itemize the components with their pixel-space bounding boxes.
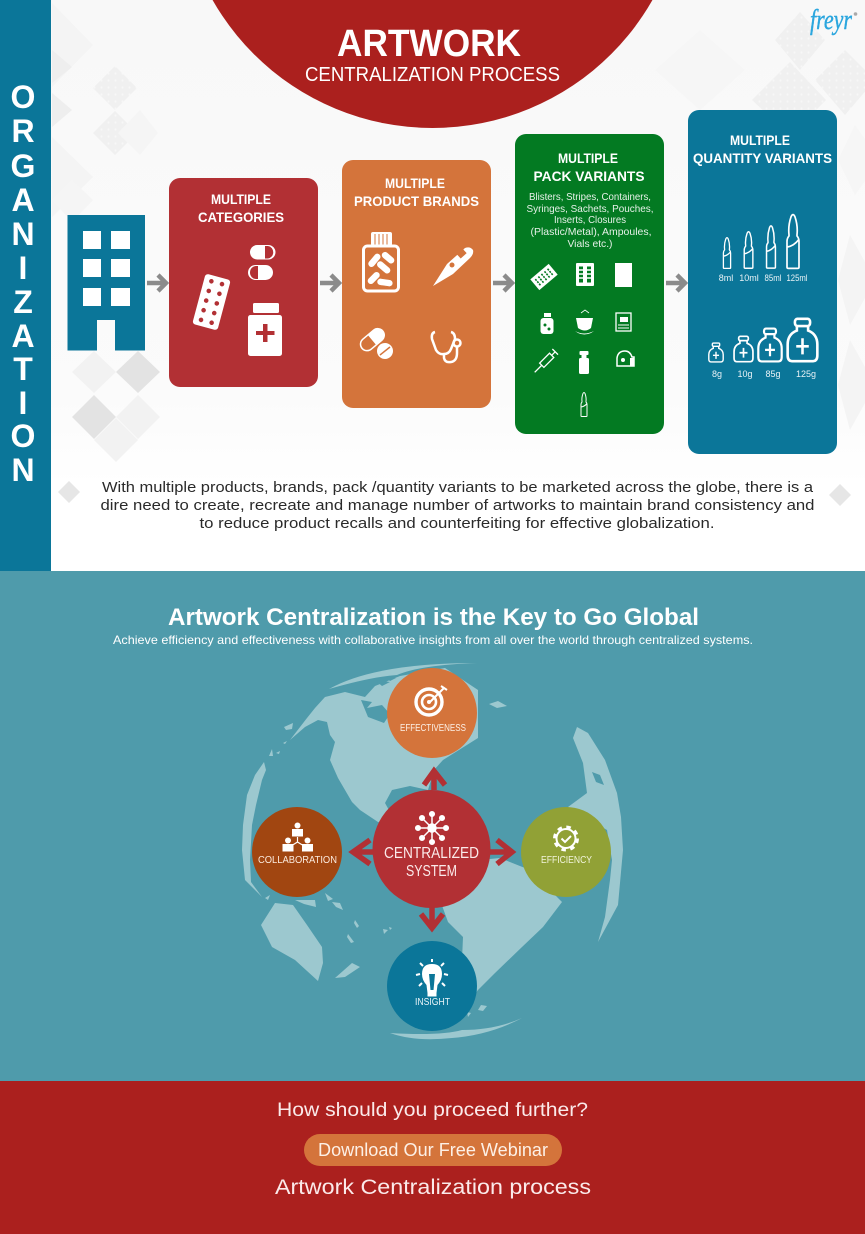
icon: ampoule bbox=[581, 392, 587, 416]
intro paragraph bbox=[100, 479, 814, 532]
button: Download Our Free Webinar bbox=[318, 1140, 548, 1160]
icon: building bbox=[68, 215, 145, 350]
ampoule labels: 85ml bbox=[764, 273, 782, 283]
panel: multiple categories bbox=[169, 178, 318, 387]
icon: closure tape bbox=[617, 351, 634, 366]
panel: multiple quantity variants bbox=[688, 110, 837, 454]
title: ARTWORK bbox=[337, 23, 522, 65]
question: How should you proceed further? bbox=[277, 1100, 588, 1121]
heading: PRODUCT BRANDS bbox=[354, 193, 479, 209]
arrow: brands to pack variants bbox=[493, 275, 512, 291]
ampoule labels: 125ml bbox=[786, 273, 808, 283]
sidebar: organization: A bbox=[11, 318, 35, 354]
circle: effectiveness bbox=[387, 668, 477, 758]
icon: blister pack bbox=[192, 274, 231, 330]
heading: PACK VARIANTS bbox=[534, 168, 644, 184]
subtitle: CENTRALIZATION PROCESS bbox=[305, 64, 560, 86]
pack variants list bbox=[526, 191, 654, 250]
intro paragraph: to reduce product recalls and counterfeiting for effective globalization. bbox=[200, 515, 714, 532]
icon: tablet strip bbox=[576, 263, 594, 286]
heading: QUANTITY VARIANTS bbox=[693, 150, 832, 166]
jar labels: 10g bbox=[737, 369, 753, 379]
icon: capsules bbox=[248, 245, 276, 280]
arrow: pack variants to quantity variants bbox=[666, 275, 685, 291]
icon: small bottle bbox=[540, 313, 554, 334]
heading bbox=[354, 175, 479, 209]
top section background bbox=[0, 0, 865, 571]
icon: syringe bbox=[532, 349, 558, 375]
title banner bbox=[180, 0, 686, 128]
icon: sachet bbox=[615, 263, 632, 287]
circle: insight bbox=[387, 941, 477, 1031]
button bbox=[304, 1134, 562, 1166]
icon: stethoscope bbox=[432, 332, 460, 362]
ampoule labels: 10ml bbox=[739, 273, 759, 283]
sidebar: organization: A bbox=[11, 182, 35, 218]
sidebar: organization: I bbox=[19, 250, 27, 286]
pack variants list: Inserts, Closures bbox=[554, 214, 626, 226]
globe map bbox=[242, 663, 623, 1039]
circle: centralized system bbox=[372, 790, 490, 908]
panel: multiple pack variants bbox=[515, 134, 664, 434]
jar labels bbox=[712, 369, 816, 379]
icon: capsule and tablet bbox=[358, 326, 393, 359]
sidebar: organization: G bbox=[11, 148, 35, 184]
sidebar: organization: O bbox=[11, 418, 35, 454]
sidebar: organization: I bbox=[19, 385, 27, 421]
label: CENTRALIZED bbox=[384, 845, 479, 862]
heading: MULTIPLE bbox=[385, 175, 445, 191]
intro paragraph: dire need to create, recreate and manage number of artworks to maintain brand consistency and bbox=[100, 497, 814, 514]
arrows: centre to four directions bbox=[353, 771, 512, 928]
label: EFFECTIVENESS bbox=[400, 723, 466, 734]
icon: hub bbox=[416, 812, 448, 844]
panel: multiple product brands bbox=[342, 160, 491, 408]
icon: blister strips bbox=[530, 264, 558, 290]
subheading: Achieve efficiency and effectiveness with collaborative insights from all over the world through centralized systems. bbox=[113, 633, 753, 647]
icon: gear with tick bbox=[554, 827, 578, 850]
icon: thermometer bbox=[433, 247, 473, 286]
heading: MULTIPLE bbox=[558, 150, 618, 166]
label bbox=[384, 845, 479, 880]
footer: call to action bbox=[0, 1081, 865, 1234]
label: COLLABORATION bbox=[258, 855, 337, 866]
icon: insert leaflet bbox=[616, 313, 631, 331]
intro paragraph: With multiple products, brands, pack /quantity variants to be marketed across the globe, there is a bbox=[102, 479, 814, 496]
sidebar: organization: N bbox=[11, 216, 35, 252]
icon: people network bbox=[282, 822, 313, 852]
circle: collaboration bbox=[252, 807, 342, 897]
arrow: building to categories bbox=[147, 275, 166, 291]
label: SYSTEM bbox=[406, 863, 457, 880]
sidebar: organization: N bbox=[11, 452, 35, 488]
heading bbox=[693, 132, 832, 166]
icon: vial bbox=[579, 351, 589, 374]
sidebar: organization bbox=[0, 0, 51, 571]
icon: pouch bbox=[575, 310, 594, 334]
jar labels: 125g bbox=[796, 369, 816, 379]
sidebar: organization: R bbox=[11, 113, 35, 149]
ampoule labels bbox=[719, 273, 808, 283]
ampoule labels: 8ml bbox=[719, 273, 733, 283]
icon: ampoules in four sizes bbox=[723, 215, 799, 268]
sidebar: organization: T bbox=[13, 351, 33, 387]
arrow: categories to brands bbox=[320, 275, 339, 291]
icon: jars in four sizes bbox=[709, 319, 817, 362]
sidebar: organization: O bbox=[11, 79, 35, 115]
sidebar: organization: Z bbox=[13, 284, 33, 320]
heading: Artwork Centralization is the Key to Go Global bbox=[168, 604, 699, 631]
heading: MULTIPLE bbox=[211, 191, 271, 207]
panel: key to go global bbox=[0, 571, 865, 1081]
pack variants list: Blisters, Stripes, Containers, bbox=[529, 191, 651, 203]
heading: CATEGORIES bbox=[198, 209, 284, 225]
circle: efficiency bbox=[521, 807, 611, 897]
label: EFFICIENCY bbox=[541, 855, 592, 866]
icon: pill jar bbox=[364, 232, 398, 291]
label: INSIGHT bbox=[415, 997, 450, 1008]
pack variants list: Vials etc.) bbox=[568, 238, 612, 250]
icon: medicine bottle bbox=[248, 303, 282, 356]
heading: MULTIPLE bbox=[730, 132, 790, 148]
icon: target bbox=[416, 686, 447, 715]
heading bbox=[534, 150, 644, 184]
icon: light bulb bbox=[416, 959, 448, 996]
jar labels: 8g bbox=[712, 369, 722, 379]
jar labels: 85g bbox=[765, 369, 781, 379]
closing line: Artwork Centralization process bbox=[275, 1176, 591, 1199]
pack variants list: (Plastic/Metal), Ampoules, bbox=[530, 226, 652, 238]
pack variants list: Syringes, Sachets, Pouches, bbox=[526, 203, 654, 215]
heading bbox=[198, 191, 284, 225]
logo: freyr: freyr bbox=[810, 4, 853, 36]
